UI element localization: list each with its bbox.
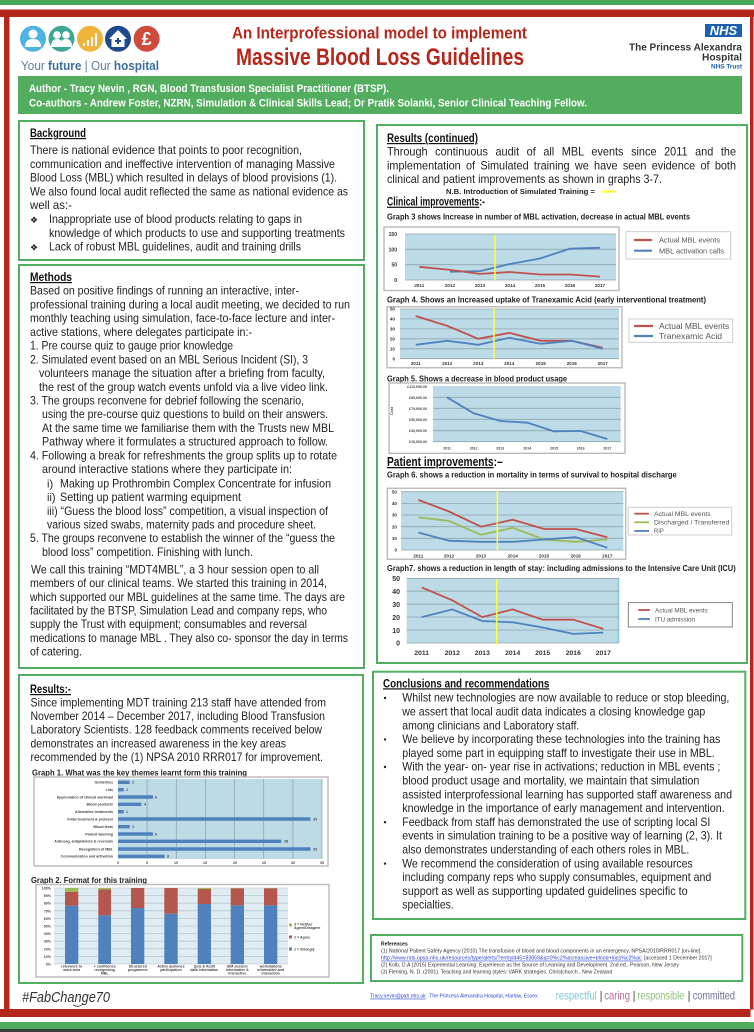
conclusions bullet list: knowledge in the importance of early management and intervention. <box>402 801 725 815</box>
graph 2 title: Graph 2. Format for this training <box>31 875 147 885</box>
graph 6: line chart of mortality <box>387 488 626 559</box>
graph 2: stacked bar chart of training format: 100% <box>42 886 52 890</box>
NHS trust logo: NHS <box>710 23 738 38</box>
results text: November 2014 – December 2017, including Blood Transfusion <box>30 709 325 723</box>
graph 6: line chart of mortality: 2013 <box>476 554 487 558</box>
methods text: professional training during a local audit meeting, we decided to run <box>30 297 350 311</box>
graph 1: bar chart of key themes: 0 <box>117 861 119 865</box>
graph 1: bar chart of key themes: Lids <box>106 788 113 792</box>
panel: methods <box>19 265 364 668</box>
graph 7 legend: Actual MBL events <box>655 608 708 614</box>
graph 2: stacked bar chart of training format: interactive <box>228 972 246 976</box>
graph 4: line chart of tranexamic acid uptake: 10 <box>390 346 395 352</box>
graph 3 legend: Actual MBL events <box>659 236 720 244</box>
panel: results continued <box>377 125 747 663</box>
title <box>232 24 527 71</box>
panel: references: (2) Kolb, D.A (2015) Experiential Learning: Experience as the Source of Learning and Development. 2nd ed., Pearson, New Jersey <box>381 963 679 969</box>
graph 6: line chart of mortality: 2012 <box>444 554 455 558</box>
NHS trust logo <box>629 23 743 70</box>
graph 3: line chart of activations and events: 2012 <box>445 283 456 288</box>
background text: communication and ineffective intervention of managing Massive <box>30 157 335 171</box>
methods text: medications to manage MBL . They also co- sponsor the day in terms <box>30 631 348 645</box>
graph 2: stacked bar chart of training format: + confidence <box>94 964 116 968</box>
graph 5: line chart of blood product cost: 2016 <box>577 446 585 450</box>
graph 1: bar chart of key themes: Alternative treatments <box>75 810 113 814</box>
icon: pound: £ <box>142 29 152 49</box>
methods text: 4. Following a break for refreshments the group splits up to rotate <box>30 448 337 462</box>
values strapline: respectful <box>556 988 597 1002</box>
graph 4: line chart of tranexamic acid uptake: 2015 <box>536 361 546 366</box>
methods text: 5. The groups reconvene to establish the winner of the “guess the <box>30 531 335 545</box>
methods text: members of our clinical teams. We started this training in 2014, <box>30 576 327 590</box>
NHS trust logo: The Princess Alexandra <box>629 42 742 54</box>
methods text: of catering. <box>30 645 82 659</box>
graph 6: line chart of mortality: 2017 <box>602 554 613 558</box>
graph 7: line chart of ITU admissions: 2017 <box>596 650 611 657</box>
graph 4: line chart of tranexamic acid uptake: 2014 <box>504 361 515 366</box>
graph 4: line chart of tranexamic acid uptake: 2017 <box>598 361 608 366</box>
graph 6 legend <box>628 507 732 535</box>
graph 2: stacked bar chart of training format: data information <box>190 968 218 972</box>
logo strapline: Your future | Our hospital <box>21 59 159 73</box>
values strapline: | <box>600 988 603 1002</box>
methods text: Pathway where it formulates a structured approach to follow. <box>42 435 328 449</box>
conclusions bullet list: including company reps who supply consumables, equipment and <box>402 870 711 884</box>
panel: results <box>19 675 363 983</box>
graph 6: line chart of mortality: 20 <box>392 524 397 530</box>
conclusions bullet list: support as well as supporting updated guidelines specific to <box>402 884 688 898</box>
conclusions bullet list: among clinicians and Laboratory staff. <box>402 718 579 732</box>
heading: results continued: Results (continued) <box>387 131 478 145</box>
contact line: The Princess Alexandra Hospital, Harlow, Essex. <box>429 994 539 1000</box>
graph 4 legend: Actual MBL events <box>659 322 729 331</box>
graph 2: stacked bar chart of training format: 40% <box>44 932 52 936</box>
graph 4 legend <box>629 319 733 342</box>
panel: references <box>371 935 742 981</box>
graph 2: stacked bar chart of training format: informative and <box>257 968 284 972</box>
simulated training key: N.B. Introduction of Simulated Training = <box>446 187 596 196</box>
graph 2: stacked bar chart of training format: 70% <box>44 909 52 913</box>
graph 1: bar chart of key themes: 2 <box>132 825 134 829</box>
graph 1: bar chart of key themes: 1 <box>126 788 128 792</box>
graph 1: bar chart of key themes: 4 <box>144 803 146 807</box>
conclusions bullet list: played some part in equipping staff to investigate their use in MBL. <box>402 746 715 760</box>
background text: Inappropriate use of blood products relating to gaps in <box>49 212 302 226</box>
methods text: volunteers manage the situation after a briefing from faculty, <box>39 366 325 380</box>
graph 7: line chart of ITU admissions: 2011 <box>414 650 429 657</box>
graph 3: line chart of activations and events: 50 <box>391 262 397 268</box>
graph 6: line chart of mortality: 2015 <box>539 554 550 558</box>
subheading: clinical improvements: Clinical improvements:- <box>387 195 485 209</box>
graph 3: line chart of activations and events: 2011 <box>414 283 425 288</box>
icon: rising bars <box>77 26 103 52</box>
graph 1: bar chart of key themes: 30 <box>291 861 295 865</box>
graph 1: bar chart of key themes: Recognition of MBL <box>79 847 114 851</box>
graph 5: line chart of blood product cost: £50,000.00 <box>409 418 427 422</box>
graph 1: bar chart of key themes: 15 <box>203 861 207 865</box>
graph 1: bar chart of key themes: 10 <box>174 861 178 865</box>
results text: demonstrates an increased awareness in the key areas <box>30 736 286 750</box>
graph 3: line chart of activations and events: 100 <box>389 248 397 254</box>
methods text: active stations, where delegates participate in:- <box>30 325 252 339</box>
graph 1: bar chart of key themes: Initial treatment & protocol <box>67 817 113 821</box>
graph 7: line chart of ITU admissions <box>392 576 619 657</box>
graph 1: bar chart of key themes: Blood tests <box>93 825 113 829</box>
methods text: using the pre-course quiz questions to build on their answers. <box>42 407 328 421</box>
graph 2: stacked bar chart of training format: 3 = Neither <box>294 922 313 926</box>
background text: knowledge of which products to use and supporting treatments <box>49 226 345 240</box>
graph 2: stacked bar chart of training format: 90% <box>44 894 52 898</box>
graph 6: line chart of mortality: 10 <box>392 536 397 541</box>
results text: Since implementing MDT training 213 staff have attended from <box>30 695 326 709</box>
graph 6 title: Graph 6. shows a reduction in mortality in terms of survival to hospital discharge <box>387 470 677 480</box>
methods text: 3. The groups reconvene for debrief following the scenario, <box>30 394 304 408</box>
graph 5: line chart of blood product cost <box>389 383 625 453</box>
graph 2: stacked bar chart of training format <box>36 884 329 977</box>
graph 6 legend: Discharged / Transferred <box>654 520 730 526</box>
graph 5: line chart of blood product cost: £110,000.00 <box>407 385 427 389</box>
methods text: Setting up patient warming equipment <box>60 490 242 504</box>
graph 4 legend: Tranexamic Acid <box>659 332 722 341</box>
graph 5: line chart of blood product cost: £30,000.00 <box>409 429 427 433</box>
results continued text: clinical and patient improvements as shown in graphs 3-7. <box>387 172 662 186</box>
graph 3: line chart of activations and events: 2017 <box>595 283 606 288</box>
graph 6: line chart of mortality: 2011 <box>413 554 424 558</box>
graph 3: line chart of activations and events: 2014 <box>505 283 516 288</box>
graph 1: bar chart of key themes: 33 <box>313 817 317 821</box>
title: Massive Blood Loss Guidelines <box>236 44 524 71</box>
background text: There is national evidence that points to poor recognition, <box>30 143 302 157</box>
graph 5: line chart of blood product cost: 2015 <box>550 446 558 450</box>
graph 1 title: Graph 1. What was the key themes learnt form this training <box>32 768 247 778</box>
values strapline <box>556 988 735 1002</box>
graph 2: stacked bar chart of training format: Agree/Disagree <box>294 926 320 930</box>
NHS trust logo: NHS Trust <box>711 64 743 70</box>
graph 7: line chart of ITU admissions: 10 <box>392 628 400 635</box>
panel: references: References <box>381 942 408 948</box>
methods text: which supported our MBL guidelines at the same time. The days are <box>29 590 345 604</box>
graph 1: bar chart of key themes: 28 <box>284 840 288 844</box>
heading: conclusions: Conclusions and recommendations <box>383 676 550 690</box>
graph 5: line chart of blood product cost: 2014 <box>523 446 531 450</box>
panel: conclusions and recommendations <box>373 672 745 919</box>
graph 5: line chart of blood product cost: £70,000.00 <box>409 407 427 411</box>
graph 4: line chart of tranexamic acid uptake: 2012 <box>442 361 453 366</box>
graph 2: stacked bar chart of training format: relevance to <box>61 964 83 968</box>
graph 4: line chart of tranexamic acid uptake: 2011 <box>411 361 421 366</box>
methods text: i) <box>47 478 53 490</box>
background text: ❖ <box>30 215 38 225</box>
graph 1: bar chart of key themes: 6 <box>155 832 157 836</box>
graph 4: line chart of tranexamic acid uptake: 50 <box>390 306 395 312</box>
methods text: 1. Pre course quiz to gauge prior knowledge <box>30 339 233 353</box>
graph 7: line chart of ITU admissions: 30 <box>392 602 400 609</box>
panel: references: [accessed 1 December 2017] <box>644 956 712 962</box>
graph 2: stacked bar chart of training format: 80% <box>44 902 52 906</box>
graph 2: stacked bar chart of training format: Quiz & Audit <box>194 964 216 968</box>
graph 1: bar chart of key themes: 8 <box>167 855 169 859</box>
graph 4: line chart of tranexamic acid uptake: 0 <box>392 356 395 362</box>
methods text: monthly teaching using simulation, face-to-face lecture and inter- <box>30 311 335 325</box>
methods text <box>29 284 350 659</box>
graph 5: line chart of blood product cost: 2011 <box>443 446 451 450</box>
graph 7 legend: ITU admission <box>655 616 695 624</box>
graph 1: bar chart of key themes: Patient warming <box>85 832 113 836</box>
results text <box>30 695 326 764</box>
methods text: iii) “Guess the blood loss” competition, a visual inspection of <box>47 504 329 518</box>
conclusions bullet list: Feedback from staff has demonstrated the use of scripting local SI <box>402 815 710 829</box>
values strapline: committed <box>693 988 735 1002</box>
graph 2: stacked bar chart of training format: 50% <box>44 924 52 928</box>
graph 6: line chart of mortality: 0 <box>394 548 397 552</box>
graph 5: line chart of blood product cost: £10,000.00 <box>409 440 427 444</box>
panel: references: (1) National Patient Safety Agency (2010) The transfusion of blood and blood components in an emergency. NPSA/2010/RRR017 [on-line]. <box>381 949 702 955</box>
background text: Lack of robust MBL guidelines, audit and training drills <box>49 240 301 254</box>
graph 6: line chart of mortality: 2016 <box>571 554 581 558</box>
graph 3: line chart of activations and events <box>384 227 619 290</box>
methods text: ii) <box>47 492 56 504</box>
graph 1: bar chart of key themes: 6 <box>155 795 157 799</box>
graph 2: stacked bar chart of training format: participation <box>160 968 182 972</box>
graph 2: stacked bar chart of training format: workstations <box>259 964 282 968</box>
values strapline: | <box>632 988 636 1002</box>
values strapline: | <box>688 988 691 1002</box>
graph 2: stacked bar chart of training format: 20% <box>44 947 52 951</box>
graph 6: line chart of mortality: 30 <box>392 512 397 518</box>
conclusions bullet list: also demonstrates understanding of each others roles in MBL. <box>402 842 689 856</box>
methods text: supply the Trust with equipment; consumables and reversal <box>30 617 307 631</box>
graph 4: line chart of tranexamic acid uptake: 2016 <box>567 361 577 366</box>
graph 7: line chart of ITU admissions: 2012 <box>445 650 460 657</box>
heading: results: Results:- <box>30 682 71 696</box>
author band: Author - Tracy Nevin , RGN, Blood Transfusion Specialist Practitioner (BTSP). <box>29 83 389 95</box>
graph 3: line chart of activations and events: 2016 <box>565 283 576 288</box>
graph 3: line chart of activations and events: 150 <box>389 232 397 238</box>
graph 1: bar chart of key themes: Appreciation of clinical workload <box>57 795 113 799</box>
contact line <box>370 994 539 1000</box>
graph 2: stacked bar chart of training format: MBL <box>101 972 109 976</box>
graph 2: stacked bar chart of training format: 60% <box>44 917 52 921</box>
graph 1: bar chart of key themes: Blood products <box>86 803 113 807</box>
graph 3 title: Graph 3 shows Increase in number of MBL activation, decrease in actual MBL events <box>387 212 690 222</box>
graph 3 legend: MBL activation calls <box>659 246 724 256</box>
graph 3 legend <box>626 232 731 259</box>
author band: Co-authors - Andrew Foster, NZRN, Simulation & Clinical Skills Lead; Dr Pratik Solanki, Senior Clinical Teaching Fellow. <box>29 98 587 110</box>
background text: Blood Loss (MBL) which resulted in delays of blood provisions (1). <box>30 170 337 184</box>
graph 1: bar chart of key themes: 25 <box>262 861 266 865</box>
graph 1: bar chart of key themes: 1 <box>126 810 128 814</box>
panel: references: http://www.nrls.npsa.nhs.uk/resources/type/alerts/?entryid45=83659&q=0%c2%acmassive+blood+loss%c2%ac <box>381 956 642 962</box>
graph 4: line chart of tranexamic acid uptake <box>387 306 622 368</box>
graph 5: line chart of blood product cost: 2017 <box>603 446 611 450</box>
graph 6 legend: RIP <box>654 528 664 535</box>
graph 7: line chart of ITU admissions: 40 <box>392 589 400 596</box>
graph 7: line chart of ITU admissions: 0 <box>396 640 400 648</box>
NHS trust logo: Hospital <box>702 52 742 64</box>
graph 4: line chart of tranexamic acid uptake: 30 <box>390 326 395 332</box>
graph 2: stacked bar chart of training format: programme <box>128 968 148 972</box>
graph 7: line chart of ITU admissions: 2015 <box>535 650 550 657</box>
graph 7: line chart of ITU admissions: 2013 <box>475 650 490 657</box>
graph 1: bar chart of key themes <box>34 777 328 866</box>
graph 6 legend: Actual MBL events <box>654 511 711 518</box>
graph 5: line chart of blood product cost: Cost <box>390 406 394 415</box>
graph 2: stacked bar chart of training format: 2 = Agree <box>294 936 310 940</box>
results text: Laboratory Scientists. 128 feedback comments received below <box>30 723 322 737</box>
graph 7: line chart of ITU admissions: 2016 <box>566 650 581 657</box>
graph 2: stacked bar chart of training format: Structured <box>129 964 147 968</box>
graph 2: stacked bar chart of training format: informative & <box>226 968 249 972</box>
graph 6: line chart of mortality: 40 <box>392 501 397 506</box>
graph 3: line chart of activations and events: 2013 <box>475 283 486 288</box>
methods text: blood loss” competition. Finishing with lunch. <box>42 545 253 559</box>
graph 2: stacked bar chart of training format: work area <box>62 968 81 972</box>
methods text: facilitated by the BTSP, Simulation Lead and company reps, who <box>30 604 327 618</box>
conclusions bullet list: specialties. <box>402 898 454 912</box>
graph 7: line chart of ITU admissions: 2014 <box>505 650 520 657</box>
background text: well as:- <box>29 198 72 212</box>
conclusions bullet list: events in simulation training to be a positive way of learning (2, 3). It <box>402 829 723 843</box>
graph 1: bar chart of key themes: 35 <box>320 861 324 865</box>
graph 2: stacked bar chart of training format: 30% <box>44 940 52 944</box>
graph 2: stacked bar chart of training format: 1 = Strongly <box>294 948 315 952</box>
conclusions bullet list: We believe by incorporating these technologies into the training has <box>402 732 720 746</box>
background text: We also found local audit reflected the same as national evidence as <box>30 184 348 198</box>
methods text: various sized swabs, maternity pads and procedure sheet. <box>47 518 316 532</box>
background text <box>29 143 348 254</box>
graph 1: bar chart of key themes: Anticoag, antiplatelets & reversals <box>54 840 113 844</box>
graph 3: line chart of activations and events: 2015 <box>535 283 546 288</box>
conclusions bullet list: blood product usage and mortality, we maintain that simulation <box>402 774 699 788</box>
graph 6: line chart of mortality: 2014 <box>508 554 518 558</box>
conclusions bullet list <box>384 691 732 912</box>
icon: staff pair <box>48 26 74 52</box>
graph 1: bar chart of key themes: Communication and activation <box>61 855 113 859</box>
methods text: 2. Simulated event based on an MBL Serious Incident (SI), 3 <box>30 352 308 366</box>
graph 3: line chart of activations and events: 0 <box>394 278 397 284</box>
conclusions bullet list: We recommend the consideration of using available resources <box>402 856 693 870</box>
conclusions bullet list: we assert that local audit data indicates a closing knowledge gap <box>401 704 706 718</box>
graph 1: bar chart of key themes: 2 <box>132 781 134 785</box>
graph 7: line chart of ITU admissions: 50 <box>392 576 400 583</box>
values strapline: responsible <box>637 988 685 1002</box>
methods text: around interactive stations where they participate in: <box>42 462 292 476</box>
graph 1: bar chart of key themes: 20 <box>233 861 237 865</box>
graph 5: line chart of blood product cost: 2013 <box>496 446 504 450</box>
subheading: patient improvements: Patient improvements:– <box>387 454 503 469</box>
conclusions bullet list: With the year- on- year rise in activations; reduction in MBL events ; <box>402 760 720 774</box>
contact line: Tracy.nevin@pah.nhs.uk <box>370 994 426 1000</box>
graph 2: stacked bar chart of training format: 0% <box>46 962 52 966</box>
graph 5: line chart of blood product cost: £90,000.00 <box>409 396 427 400</box>
graph 2: stacked bar chart of training format: recognising <box>95 968 115 972</box>
graph 1: bar chart of key themes: 5 <box>146 861 148 865</box>
graph 5: line chart of blood product cost: 2012 <box>470 446 478 450</box>
panel: references: (3) Fleming, N. D. (2001). Teaching and learning styles: VARK strategies. Christchurch , New Zealand <box>381 970 612 976</box>
hashtag: #FabChange70 <box>22 989 111 1006</box>
author band <box>18 76 742 114</box>
values strapline: caring <box>604 988 630 1002</box>
results text: recommended by the (1) NPSA 2010 RRR017 for improvement. <box>30 750 323 764</box>
icon: house <box>105 26 131 52</box>
graph 4 title: Graph 4. Shows an Increased uptake of Tranexamic Acid (early interventional treatment) <box>387 295 706 305</box>
hospital values logo <box>20 26 160 73</box>
graph 1: bar chart of key themes: Guidelines <box>95 781 113 785</box>
results continued text <box>387 145 736 186</box>
methods text: We call this training “MDT4MBL”, a 3 hour session open to all <box>31 562 319 576</box>
methods text: Based on positive findings of running an interactive, inter- <box>30 284 299 298</box>
graph 7: line chart of ITU admissions: 20 <box>392 615 400 622</box>
methods text: Making up Prothrombin Complex Concentrate for infusion <box>60 476 331 490</box>
graph 2: stacked bar chart of training format: SIM session <box>227 964 248 968</box>
title: An Interprofessional model to implement <box>232 24 527 42</box>
graph 5 title: Graph 5. Shows a decrease in blood product usage <box>387 374 567 384</box>
graph 2: stacked bar chart of training format: 10% <box>44 955 52 959</box>
graph 4: line chart of tranexamic acid uptake: 2013 <box>473 361 484 366</box>
heading: background: Background <box>30 126 86 140</box>
graph 1: bar chart of key themes: 33 <box>313 847 317 851</box>
heading: methods: Methods <box>30 270 72 284</box>
icon: patient <box>20 26 46 52</box>
graph 2: stacked bar chart of training format: interaction <box>262 972 280 976</box>
methods text: At the same time we familiarise them with the Trusts new MBL <box>42 421 334 435</box>
graph 2: stacked bar chart of training format: Active audience <box>157 964 185 968</box>
methods text: the rest of the group watch events unfold via a live video link. <box>39 380 328 394</box>
graph 6: line chart of mortality: 50 <box>392 490 397 494</box>
graph 4: line chart of tranexamic acid uptake: 40 <box>390 316 395 322</box>
graph 4: line chart of tranexamic acid uptake: 20 <box>390 336 395 342</box>
graph 7 legend <box>628 603 732 627</box>
background text: ❖ <box>30 242 38 252</box>
panel: background <box>19 121 364 260</box>
